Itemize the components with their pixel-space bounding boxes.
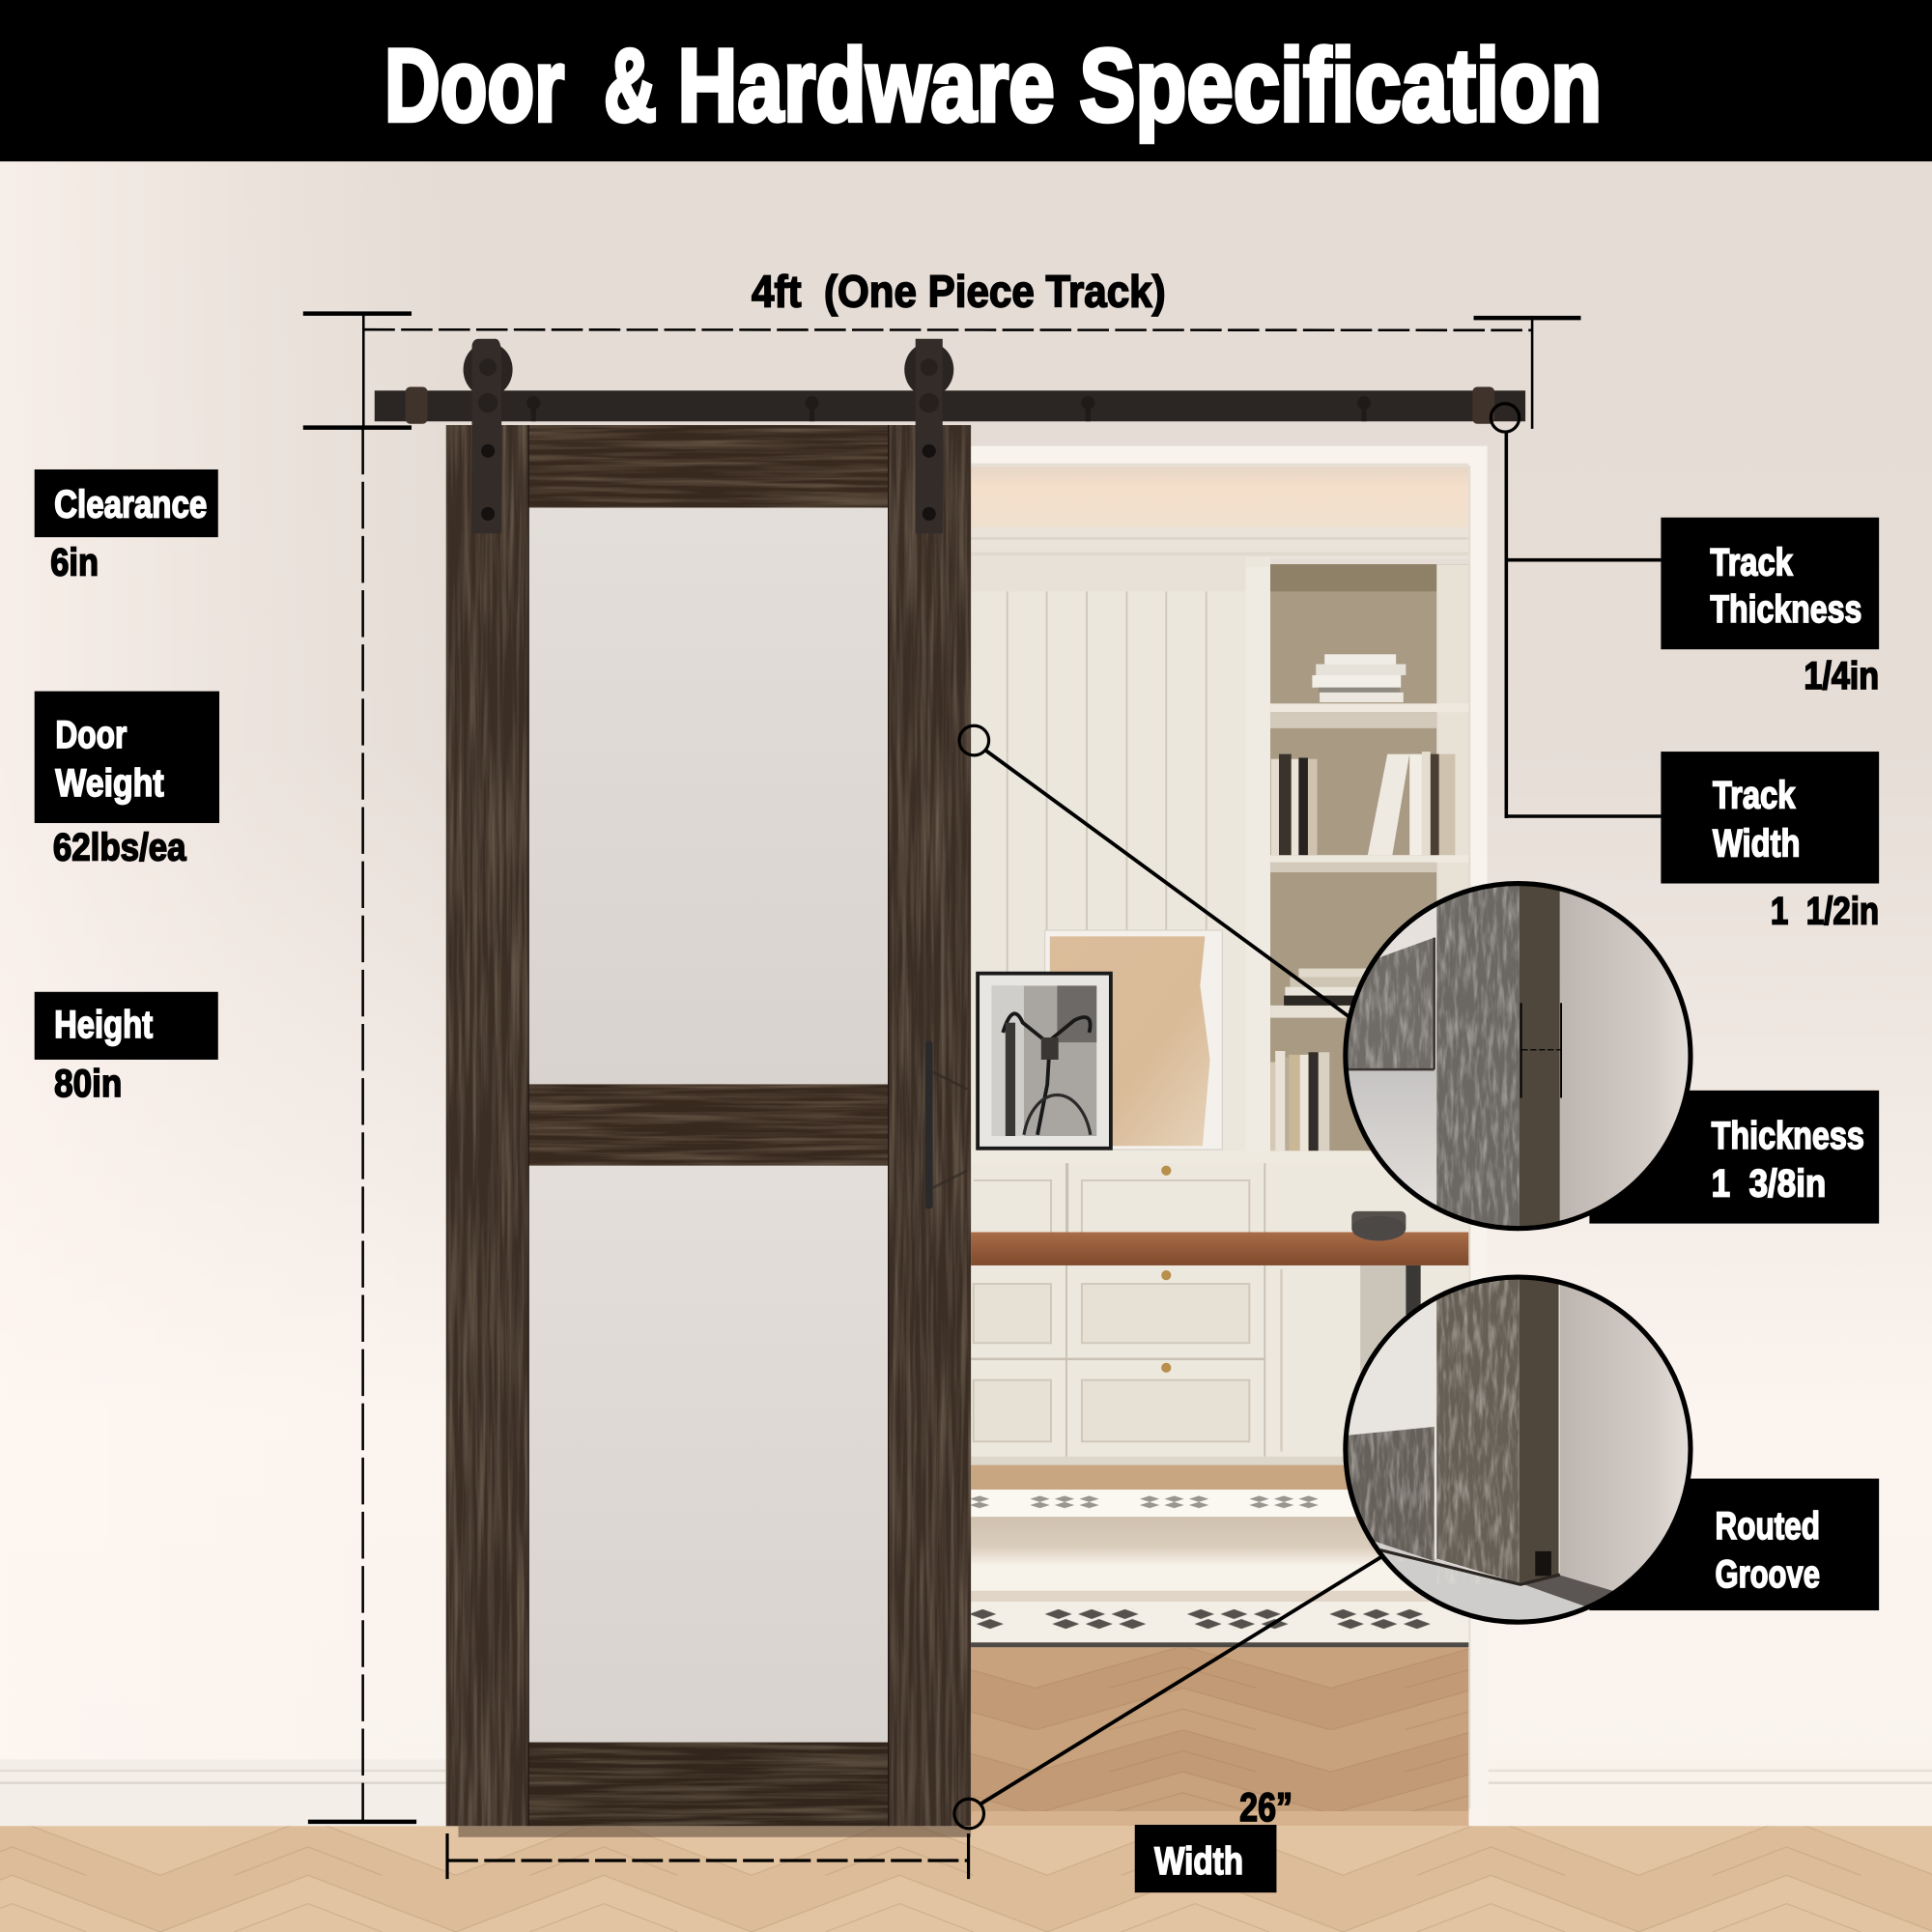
title: Hardware (678, 27, 1055, 143)
callout: width (1135, 1784, 1293, 1892)
floor: foreground herringbone (0, 1826, 1932, 1932)
track: one piece rail (375, 387, 1525, 424)
hanger: right (904, 339, 953, 533)
callout: track thickness: Thickness (1710, 588, 1861, 631)
dimension: clearance and height, left side (303, 313, 416, 1822)
dimension: track right end (1474, 318, 1580, 429)
routed groove slot (1535, 1551, 1551, 1576)
callout: routed groove (1589, 1479, 1879, 1610)
callout: track thickness (1661, 518, 1879, 697)
cabinets (971, 1151, 1468, 1465)
title banner (0, 0, 1932, 161)
thickness measure marks (1521, 1003, 1561, 1097)
top rail (528, 425, 889, 508)
dimension: door width (447, 1833, 969, 1879)
door shadow (458, 1826, 971, 1837)
leader: thickness detail (959, 725, 1350, 1018)
bottom rail (528, 1743, 889, 1826)
baseboard: left (0, 1759, 446, 1826)
callout: thickness (1589, 1091, 1879, 1224)
art: watercolour print (1045, 930, 1222, 1150)
callout: track width (1661, 752, 1879, 933)
callout: door weight: 62lbs/ea (53, 826, 186, 868)
books: bottom (1270, 1051, 1329, 1151)
glass panel: upper (528, 505, 889, 1087)
end stops (406, 387, 1494, 424)
room floor (971, 1647, 1468, 1826)
door handle (925, 1041, 967, 1208)
art: bicycle photo (978, 974, 1111, 1149)
callout: clearance: Clearance (54, 484, 207, 526)
callout: routed groove: Routed (1716, 1505, 1820, 1548)
books: middle right (1368, 752, 1455, 855)
desk top (971, 1233, 1468, 1265)
barn door (446, 425, 971, 1826)
callout: thickness: Thickness (1712, 1115, 1864, 1157)
callout: door weight (35, 692, 219, 868)
rug (971, 1465, 1468, 1647)
books: lower stack (1284, 969, 1368, 1006)
callout: track width: Width (1713, 822, 1801, 865)
left stile (446, 425, 528, 1826)
callout: height: 80in (54, 1063, 122, 1105)
title: Door (384, 27, 564, 143)
callout: width: Width (1154, 1840, 1243, 1883)
leader: track thickness and width (1491, 404, 1661, 818)
callout: height (35, 992, 218, 1105)
callout: clearance (35, 469, 218, 584)
callout: door weight: Weight (55, 762, 164, 805)
lag bolts (526, 396, 1371, 421)
callout: track thickness: Track (1710, 542, 1794, 584)
door jamb (971, 446, 1488, 1826)
title: Specification (1079, 27, 1602, 143)
callout: clearance: 6in (50, 542, 99, 584)
bookcase (1270, 564, 1468, 1151)
title (384, 27, 1602, 143)
doorway: room interior (971, 466, 1468, 1826)
callout: track thickness: 1/4in (1804, 655, 1879, 697)
callout: height: Height (54, 1004, 153, 1046)
callout: routed groove: Groove (1716, 1553, 1820, 1596)
dimension: track length dashed line (363, 328, 1531, 331)
ceramic bowl (1351, 1211, 1406, 1240)
title: & (604, 27, 657, 143)
detail lens: routed groove (1343, 1275, 1693, 1627)
crown moulding (971, 527, 1468, 559)
callout: door weight: Door (55, 714, 127, 756)
detail lens: door thickness (1343, 881, 1693, 1233)
middle rail (528, 1084, 889, 1166)
hanger: left (464, 339, 513, 533)
panelled wall (971, 557, 1270, 1153)
books: top stack (1312, 654, 1406, 702)
leader: routed groove detail (954, 1556, 1382, 1829)
baseboard: right (1489, 1759, 1932, 1826)
callout: width: 26” (1239, 1784, 1293, 1830)
callout: track width: Track (1713, 775, 1796, 817)
callout: thickness: 1 3/8in (1712, 1163, 1826, 1206)
callout: track width: 1 1/2in (1771, 891, 1879, 933)
dimension label: track length: 4ft (One Piece Track) (752, 267, 1166, 317)
ceiling glow (971, 466, 1468, 529)
books: middle left (1271, 754, 1318, 855)
right stile (889, 425, 971, 1826)
glass panel: lower (528, 1163, 889, 1745)
